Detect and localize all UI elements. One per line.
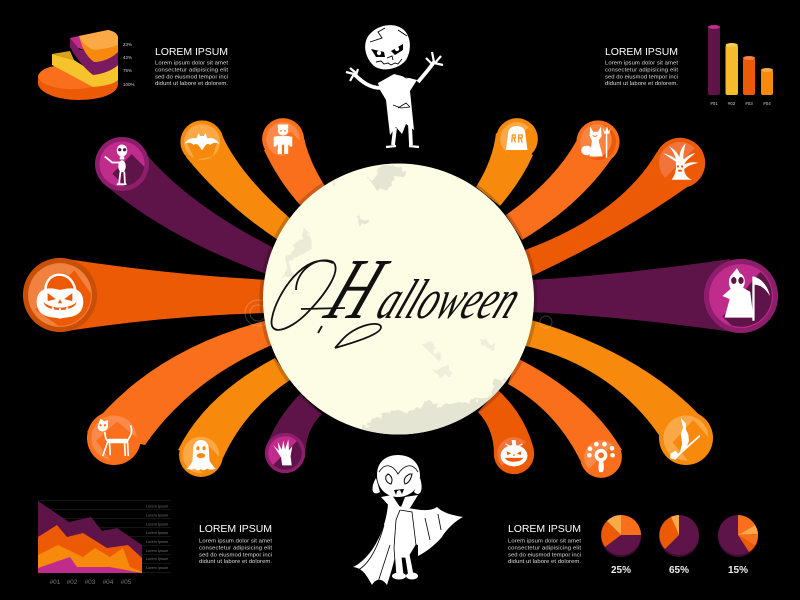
area legend labels: Lorem Ipsum xyxy=(146,504,168,508)
ray: zombie hand xyxy=(265,394,322,458)
text block: top left: didunt ut labore et dolorem. xyxy=(155,81,228,87)
text block: top left: sed do eiusmod tempor inci xyxy=(155,74,228,80)
text block: top left: consectetur adipisicing elit xyxy=(155,68,228,74)
bar chart xyxy=(708,25,773,106)
pie labels: 75% xyxy=(123,68,132,73)
area legend labels: Lorem Ipsum xyxy=(146,540,168,544)
pie labels: 23% xyxy=(123,42,132,47)
area axis labels xyxy=(50,579,132,586)
stacked pie chart xyxy=(38,30,135,100)
text block: top right: sed do eiusmod tempor inci xyxy=(605,74,678,80)
moon xyxy=(260,160,538,445)
pie chart: 25% xyxy=(601,515,641,576)
badge: small pumpkin xyxy=(494,437,534,474)
bar 3 xyxy=(743,56,755,95)
ray: devil xyxy=(506,140,612,240)
dracula collar xyxy=(381,495,418,510)
area axis labels: #05 xyxy=(121,579,132,586)
text block: bottom right: LOREM IPSUM xyxy=(508,523,581,535)
ray: pumpkin bucket xyxy=(60,258,270,332)
text block: bottom left xyxy=(199,523,272,565)
text block: bottom right xyxy=(508,523,581,565)
ray: tombstone xyxy=(476,133,533,206)
dracula xyxy=(353,455,463,585)
area legend labels xyxy=(146,504,168,570)
text block: top right xyxy=(605,46,678,87)
badge: eye plant xyxy=(580,440,622,478)
area series: magenta xyxy=(38,557,142,573)
dracula cape xyxy=(353,504,463,585)
dracula body xyxy=(394,510,416,576)
pie chart: 65% xyxy=(659,515,699,576)
text block: bottom right: didunt ut labore et dolorem. xyxy=(508,559,581,565)
text block: bottom left: LOREM IPSUM xyxy=(199,523,272,535)
text block: top right: didunt ut labore et dolorem. xyxy=(605,81,678,87)
title: Halloween: Halloween xyxy=(312,242,543,338)
area chart xyxy=(38,500,171,586)
moon texture xyxy=(282,165,515,445)
area legend labels: Lorem Ipsum xyxy=(146,522,168,526)
ray: witch xyxy=(522,319,711,435)
text block: top left: Lorem ipsum dolor sit amet xyxy=(155,60,228,66)
bar labels: #01 xyxy=(710,101,718,106)
area axis labels: #01 xyxy=(50,579,61,586)
bar 4 xyxy=(761,68,773,95)
text block: top right: consectetur adipisicing elit xyxy=(605,68,678,74)
area legend labels: Lorem Ipsum xyxy=(146,531,168,535)
zombie head xyxy=(365,25,410,69)
text block: bottom left: didunt ut labore et dolorem. xyxy=(199,559,272,565)
text block: bottom left: consectetur adipisicing elit xyxy=(199,546,272,552)
zombie xyxy=(346,25,443,147)
ray: cat xyxy=(87,320,272,445)
text block: bottom left: sed do eiusmod tempor inci xyxy=(199,552,272,558)
zombie arms and legs xyxy=(354,62,434,145)
pie labels: 100% xyxy=(123,82,135,87)
bar 1 xyxy=(708,25,720,95)
bar 2 xyxy=(726,43,738,95)
badge: skeleton xyxy=(95,137,149,191)
pie chart: 15% xyxy=(718,515,758,576)
ray: monster xyxy=(264,133,325,205)
bar labels xyxy=(710,101,771,106)
ray: bat xyxy=(186,135,292,240)
watermark rings xyxy=(245,300,552,328)
bar labels: #03 xyxy=(745,101,753,106)
ray: ghost xyxy=(178,358,290,458)
pie chart: 15%: 15% xyxy=(728,565,748,576)
pie chart: 65%: 65% xyxy=(669,565,689,576)
text block: top left xyxy=(155,46,228,87)
badge: pumpkin bucket xyxy=(22,258,97,332)
text block: top left: LOREM IPSUM xyxy=(155,46,228,58)
badge: ghost xyxy=(179,436,223,477)
badge: cat xyxy=(87,413,140,465)
area series: purple xyxy=(38,501,142,573)
pie labels: 42% xyxy=(123,55,132,60)
top layer xyxy=(79,30,118,62)
area legend labels: Lorem Ipsum xyxy=(146,566,168,570)
base layer xyxy=(38,76,118,100)
badge: reaper xyxy=(704,258,778,334)
bar labels: #04 xyxy=(763,101,771,106)
text block: top right: Lorem ipsum dolor sit amet xyxy=(605,60,678,66)
ray: skeleton xyxy=(104,155,272,276)
area axis labels: #03 xyxy=(85,579,96,586)
dracula head xyxy=(373,478,422,494)
area series: orange xyxy=(38,545,142,573)
badge: devil xyxy=(576,120,620,164)
area legend labels: Lorem Ipsum xyxy=(146,557,168,561)
area legend labels: Lorem Ipsum xyxy=(146,549,168,553)
area axis labels: #02 xyxy=(67,579,78,586)
rays xyxy=(60,133,740,460)
text block: top right: LOREM IPSUM xyxy=(605,46,678,58)
pie chart: 25%: 25% xyxy=(611,565,631,576)
badge: witch xyxy=(659,414,713,465)
purple layer xyxy=(70,36,84,50)
ray: eye plant xyxy=(508,358,622,460)
text block: bottom right: sed do eiusmod tempor inci xyxy=(508,552,581,558)
area series: dark orange xyxy=(38,525,142,573)
badge: tree xyxy=(657,138,706,188)
badge: bat xyxy=(180,120,224,164)
badge: tombstone xyxy=(497,118,538,154)
zombie torso xyxy=(378,74,417,135)
text block: bottom right: Lorem ipsum dolor sit amet xyxy=(508,538,581,544)
area axis labels: #04 xyxy=(103,579,114,586)
ray: tree xyxy=(525,152,690,276)
ray: reaper xyxy=(530,259,740,333)
bar labels: #02 xyxy=(728,101,736,106)
badge: monster xyxy=(262,118,304,156)
ray: small pumpkin xyxy=(478,390,534,458)
badge: zombie hand xyxy=(264,432,306,474)
text block: bottom right: consectetur adipisicing elit xyxy=(508,546,581,552)
text block: bottom left: Lorem ipsum dolor sit amet xyxy=(199,538,272,544)
pie labels xyxy=(123,42,135,87)
yellow layer xyxy=(52,51,74,60)
area legend labels: Lorem Ipsum xyxy=(146,514,168,518)
